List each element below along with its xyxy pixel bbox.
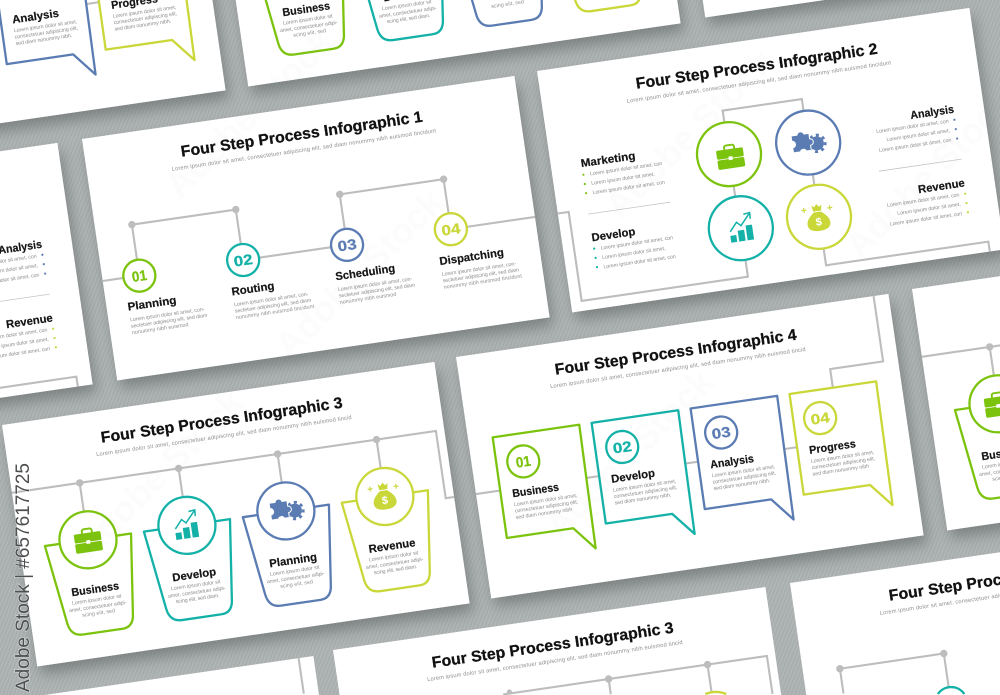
circle: revenue: [783, 181, 855, 253]
step 01: [121, 251, 209, 336]
card: revenue: [338, 462, 441, 595]
block: revenue: Lorem ipsum dolor sit amet, con: [889, 211, 963, 228]
step 03: Scheduling: [335, 263, 396, 283]
block: marketing: [580, 147, 665, 197]
cup: revenue: [553, 0, 652, 15]
connector dots: [128, 175, 448, 229]
block: marketing: Lorem ipsum dolor sit amet, con: [592, 180, 665, 196]
bubble: business: sed diam nonummy nibh: [515, 507, 573, 521]
card: planning: Lorem ipsum dolor sit: [270, 565, 320, 578]
step 03: 03: [337, 237, 358, 255]
circle: business: [693, 118, 765, 190]
bubble: analysis: 03: [711, 425, 732, 443]
step 03: [329, 220, 417, 306]
body: develop: scing elit, sed diam.: [386, 13, 431, 25]
connector dot: [985, 343, 994, 351]
panel: top-right blank slide: [670, 0, 1000, 17]
bubble: business: Lorem ipsum dolor sit amet,: [514, 493, 578, 508]
card: business: amet, consectetuer adipi-: [69, 600, 127, 614]
bubble: progress: [91, 0, 196, 73]
body: progress: Lorem ipsum dolor sit amet,: [112, 5, 177, 20]
block: develop: Lorem ipsum dolor sit amet, con: [600, 235, 674, 252]
block: marketing: Marketing: [580, 150, 636, 170]
card: develop: Lorem ipsum dolor sit: [171, 579, 221, 592]
card: planning: amet, consectetuer adipi-: [267, 571, 325, 585]
subtitle: Lorem ipsum dolor sit amet, consectetuer adipiscing elit, sed diam nonummy nibh euismod tincid: [96, 415, 352, 458]
step 04: Lorem ipsum dolor sit amet, con-: [441, 261, 517, 278]
block: marketing: Lorem ipsum dolor sit amet,: [591, 172, 655, 187]
block: revenue: [885, 177, 970, 228]
circle top: revenue: [705, 692, 726, 694]
bubble: progress: Lorem ipsum dolor sit amet,: [810, 450, 875, 465]
title: Four Step Process Infographic 1: [180, 109, 424, 161]
step 03: nonummy nibh euismod: [339, 292, 397, 306]
panel: right slide, business cup: [912, 226, 1000, 530]
connector line: [12, 430, 454, 560]
step 04: sectetuer adipiscing elit, sed diam: [442, 267, 520, 284]
block: revenue: [0, 312, 58, 363]
panel: top-middle slide, cups: [213, 0, 681, 86]
block: analysis: Lorem ipsum dolor sit amet, con: [879, 137, 952, 154]
step 01: nonummy nibh euismod: [132, 322, 189, 336]
block: develop: Lorem ipsum dolor sit amet, con: [603, 254, 676, 270]
step 01: Lorem ipsum dolor sit amet, con-: [130, 307, 205, 323]
faint stock watermark: Adobe Stock: [597, 40, 782, 226]
bubble: develop: sed diam nonummy nibh.: [614, 492, 672, 507]
step 02: Lorem ipsum dolor sit amet, con-: [234, 291, 309, 308]
subtitle: Lorem ipsum dolor sit amet, consectetuer adipiscing elit, sed diam nonummy nibh euismod tincidunt: [171, 128, 437, 173]
step 04: [433, 204, 523, 291]
panel: left slide, analysis and revenue lists: [0, 143, 93, 447]
step 04: Dispatching: [439, 247, 505, 268]
card: planning: Planning: [269, 551, 318, 570]
step 03: sectetuer adipiscing elit, sed diam: [339, 282, 416, 300]
bubble: analysis: sed diam nonummy nibh.: [713, 478, 771, 492]
body: progress: sed diam nonummy nibh.: [114, 19, 172, 33]
body: analysis: consectetuer adipiscing elit,: [14, 26, 79, 41]
subtitle: Lorem ipsum dolor sit amet, consectetuer adipiscing elit, sed diam nonummy nibh euismod tincid: [427, 640, 683, 683]
panel: bottom-right slide: [790, 552, 1000, 695]
block: analysis: [0, 239, 47, 289]
faint stock watermark: Adobe Stock: [67, 380, 252, 566]
bubble: progress: consectetuer adipiscing elit,: [811, 456, 876, 471]
card: business: Business: [71, 580, 120, 599]
bubble: progress: sed diam nonummy nibh: [812, 464, 870, 478]
bubble: business: Business: [512, 482, 560, 500]
connector dots: [836, 650, 948, 672]
cup: develop: [355, 0, 454, 44]
body: business: amet, consectetuer adipi-: [280, 20, 338, 34]
body: business: [279, 13, 339, 41]
bubble: business: [492, 425, 597, 561]
panel: bottom-left slide: [45, 656, 319, 695]
card: revenue: Revenue: [368, 537, 416, 556]
block: revenue: Revenue: [5, 312, 54, 331]
step 02: nonummy nibh euismod tincidunt: [236, 304, 315, 321]
card: planning: [239, 476, 342, 609]
step 03: Lorem ipsum dolor sit amet, con-: [338, 276, 413, 293]
circle: develop: [705, 192, 777, 265]
step 02: Routing: [231, 280, 275, 298]
block: revenue: Lorem ipsum dolor sit amet, con: [887, 192, 960, 209]
card: planning: scing elit, sed: [280, 579, 313, 590]
panel: bottom-middle slide: [333, 587, 781, 695]
bubble: progress: 04: [810, 410, 831, 429]
card: revenue: Lorem ipsum dolor sit: [368, 550, 419, 563]
subtitle: Lorem ipsum dolor sit amet, consectetuer adipiscing elit, sed diam nonummy nibh euismod tincidunt: [626, 60, 892, 105]
step 01: sectetuer adipiscing elit, sed diam: [131, 313, 208, 330]
bubble: analysis: Analysis: [709, 453, 755, 471]
block: develop: Lorem ipsum dolor sit amet,: [602, 246, 666, 261]
connector line: [456, 296, 894, 494]
connector line: [95, 167, 535, 281]
circle top: step 02: [938, 687, 964, 694]
connector line: [299, 658, 304, 694]
body: develop: amet, consectetuer adipi-: [379, 5, 437, 20]
body: progress: consectetuer adipiscing elit,: [113, 11, 178, 26]
faint stock watermark: Adobe Stock: [267, 180, 452, 366]
bubble: develop: Lorem ipsum dolor sit amet,: [613, 479, 677, 494]
card: revenue: scing elit, sed diam.: [373, 564, 418, 576]
block: analysis: Lorem ipsum dolor sit amet,: [886, 128, 950, 143]
connector lines: [547, 75, 990, 312]
heading: analysis: Analysis: [11, 8, 60, 26]
panel: top-left slide, bubbles: [0, 0, 226, 153]
block: analysis: Analysis: [910, 104, 955, 122]
title: Four Step Process Infographic 4: [554, 327, 798, 379]
bubble: analysis: Lorem ipsum dolor sit amet,: [711, 464, 776, 479]
bubble: business: 01: [515, 454, 532, 472]
body: business: Lorem ipsum dolor sit: [283, 14, 333, 27]
panel: infographic 2 icon circles: [537, 8, 1000, 312]
bubble: progress: [789, 381, 894, 518]
body: analysis: sed diam nonummy nibh.: [15, 33, 73, 47]
connector line: [922, 328, 1000, 388]
card: revenue: amet, consectetuer adipi-: [366, 557, 424, 571]
step 02: [225, 235, 315, 321]
card: business: scing elit, sed: [82, 608, 116, 619]
step 01: 01: [131, 268, 148, 286]
block: develop: [591, 221, 676, 272]
bubble: develop: 02: [612, 439, 633, 458]
title: Four Step Process Infographic 3: [431, 620, 675, 672]
panel: infographic 4 speech bubbles: [456, 294, 924, 598]
body: analysis: Lorem ipsum dolor sit amet,: [13, 19, 78, 34]
subtitle: Lorem ipsum dolor sit amet, consectetuer adipiscing elit, sed diam nonummy nibh euismod tincid: [550, 347, 806, 390]
step 04: nonummy nibh euismod tincidunt: [443, 273, 523, 291]
block: revenue: Revenue: [917, 177, 966, 196]
cup: business: [951, 369, 1000, 502]
cup: business: [256, 0, 355, 58]
step 04: 04: [441, 221, 462, 240]
connector dots: [507, 661, 711, 695]
connector line: [840, 654, 949, 694]
step 01: Planning: [127, 295, 177, 314]
body: business: scing elit, sed: [293, 28, 327, 39]
connector dots: [75, 435, 381, 487]
body: analysis: [13, 19, 80, 47]
bubble: analysis: [690, 396, 795, 532]
block: revenue: Lorem ipsum dolor sit amet,: [897, 202, 961, 217]
bubble: business: consectetuer adipiscing elit,: [515, 499, 579, 515]
body: progress: [112, 5, 178, 33]
faint stock watermark: Adobe Stock: [537, 360, 722, 546]
bubble: develop: consectetuer adipiscing elit,: [613, 485, 678, 500]
card: business: Lorem ipsum dolor sit: [72, 594, 122, 607]
bubble: analysis: consectetuer adipiscing elit,: [712, 471, 777, 486]
card: develop: [140, 491, 243, 624]
cup: planning: [454, 0, 553, 29]
connector line: [503, 656, 772, 694]
faint stock watermark: [67, 20, 1000, 566]
faint stock watermark: Adobe Stock: [157, 20, 342, 206]
panel: infographic 1 timeline: [82, 76, 550, 380]
step 02: 02: [233, 252, 254, 271]
panel: infographic 3 cups: [2, 362, 470, 666]
card: develop: Develop: [172, 566, 217, 584]
block: analysis: [874, 104, 959, 154]
block: marketing: Lorem ipsum dolor sit amet, con: [590, 161, 663, 177]
vertical stock id: Adobe Stock | #657617725: [13, 463, 34, 692]
step 02: sectetuer adipiscing elit, sed diam: [235, 298, 312, 315]
bubble: analysis: [0, 0, 97, 87]
circle: planning: [772, 106, 844, 179]
title: Four Step Process Infographic 2: [635, 41, 879, 93]
bubble: progress: Progress: [808, 438, 857, 457]
heading: business: Business: [282, 0, 331, 19]
block: analysis: Lorem ipsum dolor sit amet, con: [876, 119, 949, 135]
connector line: [0, 377, 78, 410]
bubble: develop: Develop: [610, 468, 656, 486]
body: develop: [378, 0, 438, 26]
card: develop: scing elit, sed diam.: [175, 593, 220, 605]
card: business: [41, 505, 144, 638]
bubble: develop: [591, 410, 696, 546]
card: develop: amet, consectetuer adipi-: [168, 585, 226, 600]
block: develop: Develop: [591, 226, 636, 244]
title: Four Step Process Infographic 3: [100, 395, 344, 447]
